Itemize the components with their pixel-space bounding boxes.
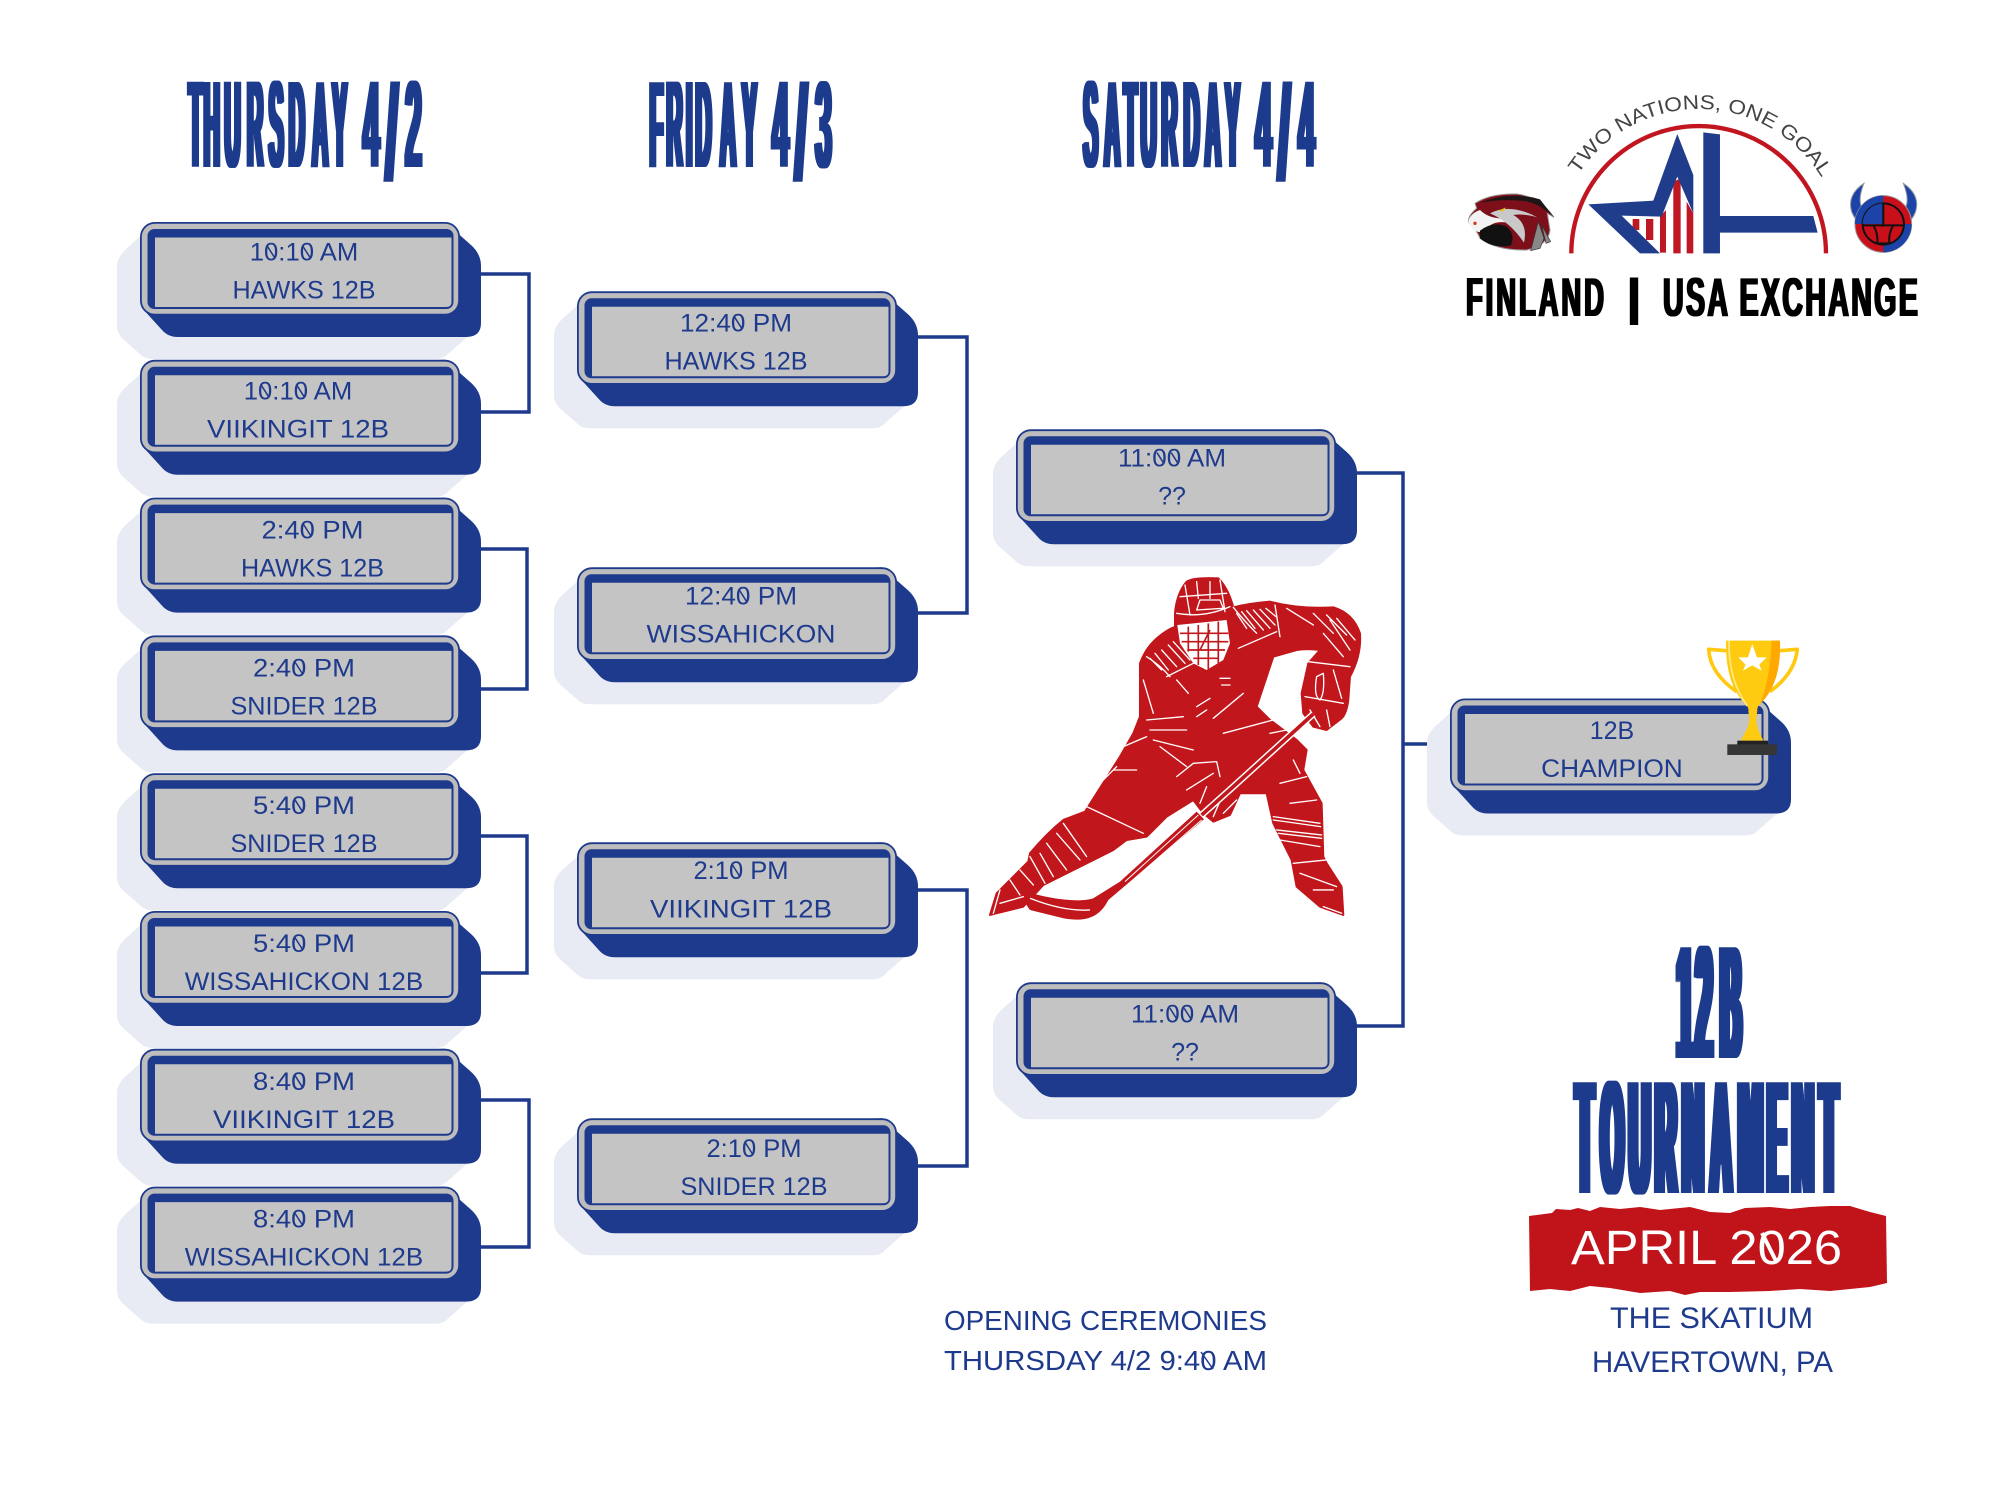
match card: 12:40 PM Wissahickon: 12:40 PM bbox=[685, 583, 797, 611]
heading: Friday: 4 bbox=[772, 57, 789, 195]
heading: Thursday: 2 bbox=[405, 57, 422, 195]
match card: 2:40 PM Snider: 2:40 PM bbox=[253, 654, 355, 682]
match card: 12:40 PM Hawks bbox=[554, 291, 918, 428]
banner: April 2026 bbox=[1529, 1206, 1887, 1295]
match card: semifinal 1: 11:00 AM bbox=[1118, 445, 1226, 473]
match card: 5:40 PM Wissahickon: WISSAHICKON 12B bbox=[185, 968, 423, 996]
match card: 8:40 PM Viikingit bbox=[117, 1049, 481, 1186]
title: 12B: 12B bbox=[1677, 912, 1741, 1093]
heading: Saturday: 4 bbox=[1298, 57, 1315, 195]
match card: 2:40 PM Snider bbox=[117, 635, 481, 772]
match card: 2:40 PM Hawks: 2:40 PM bbox=[262, 517, 364, 545]
logo title bbox=[1466, 267, 1918, 329]
column: Saturday 4/4 bbox=[993, 56, 1357, 1119]
heading: Saturday: 4 bbox=[1255, 57, 1272, 195]
match card: semifinal 2: ?? bbox=[1171, 1038, 1199, 1066]
match card: 8:40 PM Wissahickon: 8:40 PM bbox=[253, 1206, 355, 1234]
banner text: APRIL 2026 bbox=[1571, 1222, 1842, 1275]
match card: semifinal 2: 11:00 AM bbox=[1131, 1000, 1239, 1028]
connectors: round 2 to semifinal bbox=[918, 337, 967, 1166]
heading: Friday bbox=[650, 56, 832, 208]
column: Friday 4/3 bbox=[554, 56, 918, 1255]
heading: Thursday: THURSDAY bbox=[189, 56, 347, 193]
match card: 5:40 PM Snider bbox=[117, 773, 481, 910]
heading: Friday: FRIDAY bbox=[650, 56, 757, 193]
match card: 2:40 PM Hawks bbox=[117, 498, 481, 635]
icon: trophy bbox=[1709, 641, 1797, 755]
match card: 8:40 PM Viikingit: 8:40 PM bbox=[253, 1068, 355, 1096]
match card: 10:10 AM Viikingit: VIIKINGIT 12B bbox=[207, 416, 389, 444]
heading: Thursday: 4 bbox=[363, 57, 380, 195]
heading: Saturday: SATURDAY bbox=[1083, 56, 1240, 193]
opening ceremonies note: THURSDAY 4/2 9:40 AM bbox=[944, 1345, 1267, 1376]
match card: semifinal 1 bbox=[993, 429, 1357, 566]
logo emblem: star and L bbox=[1571, 126, 1826, 253]
match card: 8:40 PM Viikingit: VIIKINGIT 12B bbox=[213, 1106, 395, 1134]
match card: 12:40 PM Hawks: HAWKS 12B bbox=[664, 347, 808, 375]
match card: 10:10 AM Viikingit bbox=[117, 360, 481, 497]
match card: 2:40 PM Snider: SNIDER 12B bbox=[230, 692, 378, 720]
title: Tournament: TOURNAMENT bbox=[1576, 1047, 1838, 1228]
match card: 2:10 PM Viikingit bbox=[554, 842, 918, 979]
heading: Saturday: / bbox=[1277, 58, 1291, 208]
opening ceremonies note: OPENING CEREMONIES bbox=[944, 1305, 1267, 1336]
match card: 10:10 AM Hawks: 10:10 AM bbox=[250, 239, 358, 267]
heading: Thursday bbox=[189, 56, 422, 208]
match card: 12:40 PM Wissahickon: WISSAHICKON bbox=[646, 621, 836, 649]
icon: viikingit logo bbox=[1851, 183, 1917, 252]
match card: 10:10 AM Hawks: HAWKS 12B bbox=[232, 277, 376, 305]
venue text bbox=[1592, 1302, 1833, 1379]
champion card: 12B bbox=[1590, 717, 1634, 745]
match card: 2:10 PM Snider: SNIDER 12B bbox=[680, 1173, 828, 1201]
illustration: hockey player bbox=[990, 578, 1360, 920]
match card: 5:40 PM Wissahickon: 5:40 PM bbox=[253, 930, 355, 958]
match card: 5:40 PM Snider: SNIDER 12B bbox=[230, 830, 378, 858]
match card: semifinal 2 bbox=[993, 982, 1357, 1119]
match card: 5:40 PM Wissahickon bbox=[117, 911, 481, 1048]
icon: hawks logo bbox=[1468, 194, 1554, 251]
heading: Friday: / bbox=[794, 58, 808, 208]
match card: semifinal 1: ?? bbox=[1158, 483, 1186, 511]
logo title: USA EXCHANGE bbox=[1663, 267, 1918, 329]
match card: 12:40 PM Hawks: 12:40 PM bbox=[680, 309, 792, 337]
match card: 12:40 PM Wissahickon bbox=[554, 567, 918, 704]
column: Thursday 4/2 bbox=[117, 56, 481, 1324]
match card: 2:40 PM Hawks: HAWKS 12B bbox=[241, 555, 384, 583]
logo title: | bbox=[1627, 269, 1641, 326]
champion card bbox=[1427, 698, 1791, 836]
match card: 5:40 PM Snider: 5:40 PM bbox=[253, 792, 355, 820]
connectors: round 1 to round 2 bbox=[481, 274, 529, 1247]
heading: Friday: 3 bbox=[815, 57, 832, 195]
heading: Saturday bbox=[1083, 56, 1315, 208]
match card: 2:10 PM Snider bbox=[554, 1118, 918, 1255]
match card: 8:40 PM Wissahickon: WISSAHICKON 12B bbox=[185, 1244, 423, 1272]
opening ceremonies note bbox=[944, 1305, 1267, 1376]
match card: 2:10 PM Viikingit: VIIKINGIT 12B bbox=[650, 896, 832, 924]
logo tagline: TWO NATIONS, ONE GOAL bbox=[1567, 95, 1828, 177]
logo title: FINLAND bbox=[1466, 268, 1604, 329]
venue text: HAVERTOWN, PA bbox=[1592, 1346, 1833, 1379]
connectors: semifinal to champion bbox=[1356, 473, 1450, 1026]
match card: 10:10 AM Hawks bbox=[117, 222, 481, 359]
match card: 2:10 PM Snider: 2:10 PM bbox=[706, 1135, 802, 1163]
match card: 2:10 PM Viikingit: 2:10 PM bbox=[694, 857, 788, 885]
match card: 8:40 PM Wissahickon bbox=[117, 1187, 481, 1324]
match card: 10:10 AM Viikingit: 10:10 AM bbox=[244, 378, 352, 406]
logo: Finland USA exchange bbox=[1466, 95, 1918, 329]
venue text: THE SKATIUM bbox=[1610, 1302, 1813, 1335]
heading: Thursday: / bbox=[385, 58, 399, 208]
champion card: CHAMPION bbox=[1541, 755, 1683, 783]
